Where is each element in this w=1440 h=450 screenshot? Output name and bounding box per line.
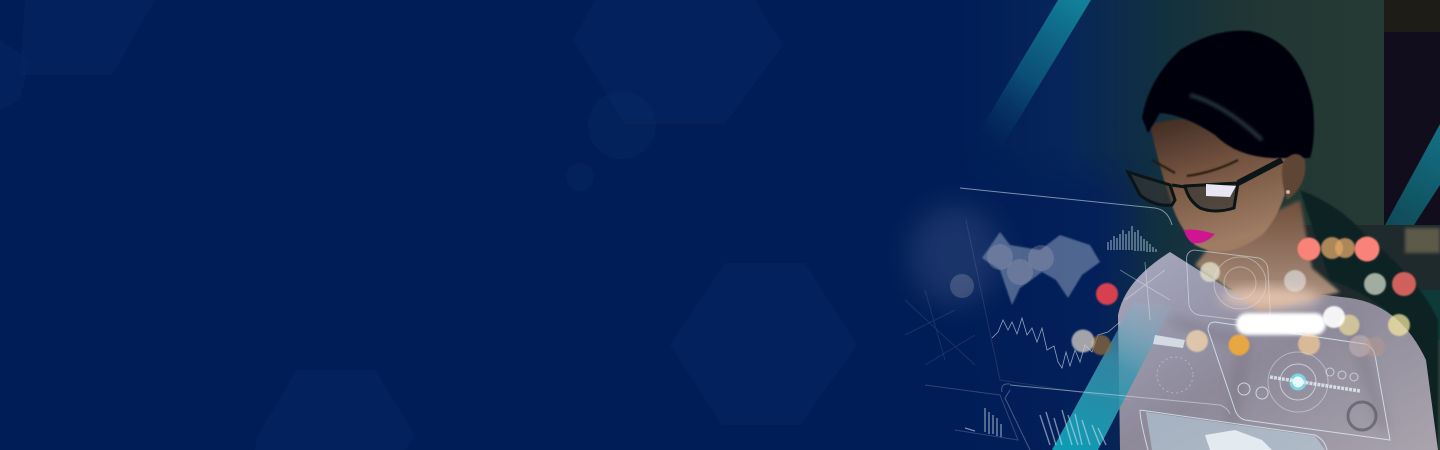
glasses <box>1128 160 1282 211</box>
bottom map continents <box>1205 430 1272 450</box>
hair <box>1142 31 1314 158</box>
hair highlight <box>1190 95 1262 140</box>
white glare <box>1236 313 1326 335</box>
pale lights <box>1072 262 1410 357</box>
gauge panel <box>1186 249 1271 324</box>
hair tail behind shoulder <box>1300 190 1438 448</box>
small data diagrams <box>1120 257 1266 393</box>
woman <box>1118 31 1438 450</box>
shirt <box>1118 252 1438 450</box>
faint hexagon pattern <box>0 0 857 450</box>
shirt folds <box>1170 320 1385 430</box>
bokeh lights <box>910 205 1416 357</box>
centre data panel <box>1010 385 1230 414</box>
street map <box>905 290 975 365</box>
banner illustration <box>608 0 1440 450</box>
face <box>1150 119 1290 252</box>
lower teal stripe <box>1052 302 1173 450</box>
ear <box>1282 154 1305 200</box>
white glare dot <box>1323 306 1345 328</box>
brows <box>1152 160 1238 176</box>
holographic interface panels <box>925 188 1390 450</box>
small white bars <box>1153 335 1185 348</box>
bar chart top right of map <box>1108 226 1156 252</box>
amber lights <box>1091 237 1355 356</box>
radar panel <box>1208 322 1390 440</box>
blurred glow left of shirt <box>910 205 1000 305</box>
line chart <box>992 318 1120 368</box>
upper teal stripe <box>968 0 1091 150</box>
blurred street background <box>1300 225 1440 340</box>
radar dial <box>1238 352 1376 430</box>
bottom panels <box>1002 384 1030 450</box>
peach glow <box>1220 287 1320 309</box>
neck and chest <box>1195 200 1340 312</box>
navy shade behind panels <box>1083 195 1119 450</box>
red lights <box>1096 236 1416 305</box>
world map panel <box>960 188 1172 225</box>
lips <box>1184 230 1215 243</box>
lens reflection <box>1206 184 1236 197</box>
muted lights over map <box>950 244 1054 298</box>
photo backdrop: wall <box>960 0 1440 450</box>
earring <box>1286 190 1290 194</box>
world map <box>982 232 1100 305</box>
dark doorway at right <box>1384 0 1440 232</box>
bottom map panel fill <box>1146 412 1325 450</box>
lower left bar chart <box>965 408 1106 445</box>
right teal stripe <box>1385 124 1440 225</box>
